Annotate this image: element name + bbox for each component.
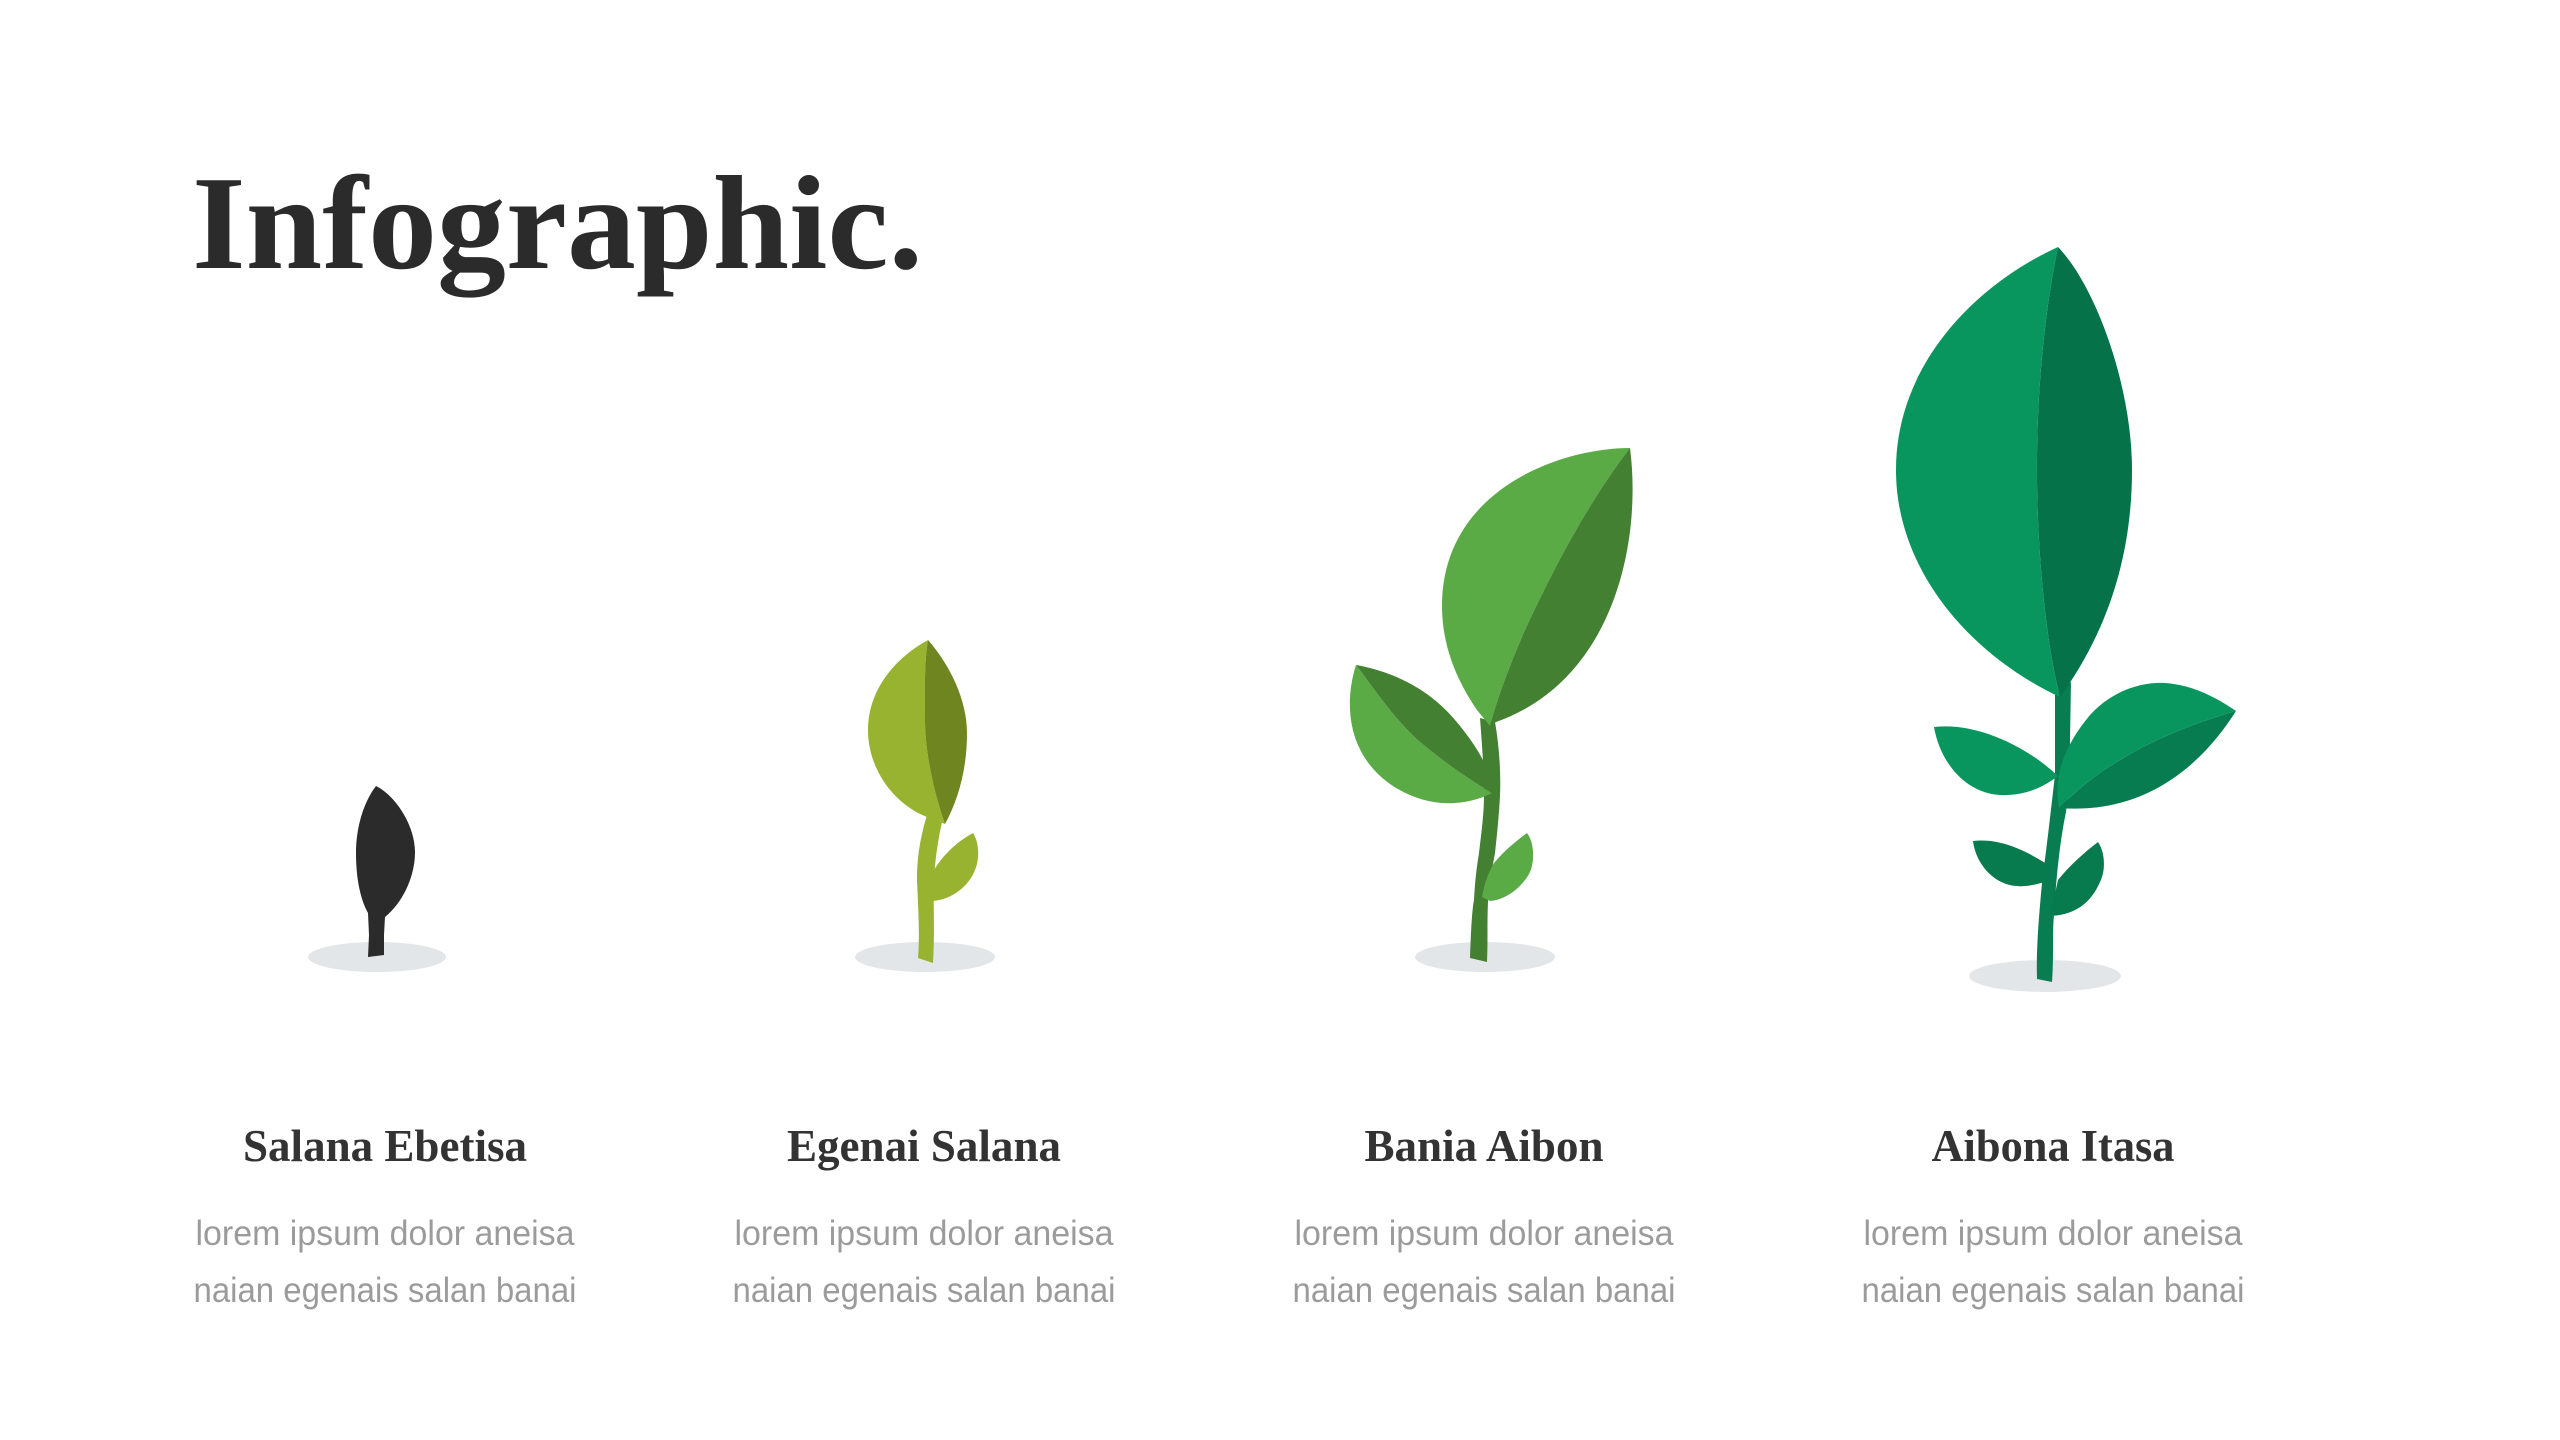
body 2: naian egenais salan banai xyxy=(732,1271,1116,1310)
body 3 xyxy=(1292,1214,1676,1310)
body 2: lorem ipsum dolor aneisa xyxy=(734,1214,1114,1253)
body 1: naian egenais salan banai xyxy=(194,1271,576,1310)
body 2 xyxy=(732,1214,1116,1310)
lower right leaf 4 xyxy=(2050,842,2104,916)
plant 4: mature plant xyxy=(1896,247,2236,992)
left leaf light side 3 xyxy=(1350,665,1492,803)
stem 2 xyxy=(917,815,942,963)
main leaf light side 2 xyxy=(868,640,945,824)
ground shadow 4 xyxy=(1969,960,2121,992)
lower left leaf 4 xyxy=(1973,841,2050,886)
ground shadow 1 xyxy=(308,942,446,972)
caption 2 xyxy=(732,1121,1116,1310)
main leaf dark side 2 xyxy=(925,640,967,824)
small leaf 3 xyxy=(1482,833,1533,901)
body 4 xyxy=(1862,1214,2244,1310)
stem 3 xyxy=(1470,718,1500,962)
left leaf 4 xyxy=(1934,726,2058,795)
title: Infographic. xyxy=(192,149,923,298)
heading 4: Aibona Itasa xyxy=(1932,1121,2174,1171)
body 4: naian egenais salan banai xyxy=(1862,1271,2244,1310)
stem 4 xyxy=(2037,682,2071,982)
heading 1: Salana Ebetisa xyxy=(243,1121,527,1171)
main leaf dark side 4 xyxy=(2037,247,2132,697)
caption 1 xyxy=(194,1121,576,1310)
plant 2: sprout xyxy=(855,640,995,972)
right leaf light side 4 xyxy=(2057,683,2236,808)
body 4: lorem ipsum dolor aneisa xyxy=(1864,1214,2243,1253)
right leaf dark side 4 xyxy=(2059,711,2236,809)
plant 1: seedling xyxy=(308,786,446,972)
main leaf dark side 3 xyxy=(1490,448,1633,726)
body 1: lorem ipsum dolor aneisa xyxy=(196,1214,575,1253)
caption 4 xyxy=(1862,1121,2244,1310)
small leaf 2 xyxy=(932,833,978,901)
caption 3 xyxy=(1292,1121,1676,1310)
plant 3: young plant xyxy=(1350,448,1633,972)
seedling leaf and stem xyxy=(356,786,415,957)
main leaf light side 4 xyxy=(1896,247,2060,697)
body 3: naian egenais salan banai xyxy=(1292,1271,1676,1310)
heading 2: Egenai Salana xyxy=(787,1121,1061,1171)
body 3: lorem ipsum dolor aneisa xyxy=(1294,1214,1674,1253)
heading 3: Bania Aibon xyxy=(1364,1121,1604,1171)
body 1 xyxy=(194,1214,576,1310)
left leaf dark side 3 xyxy=(1356,665,1495,793)
main leaf light side 3 xyxy=(1442,448,1630,726)
ground shadow 2 xyxy=(855,942,995,972)
ground shadow 3 xyxy=(1415,942,1555,972)
